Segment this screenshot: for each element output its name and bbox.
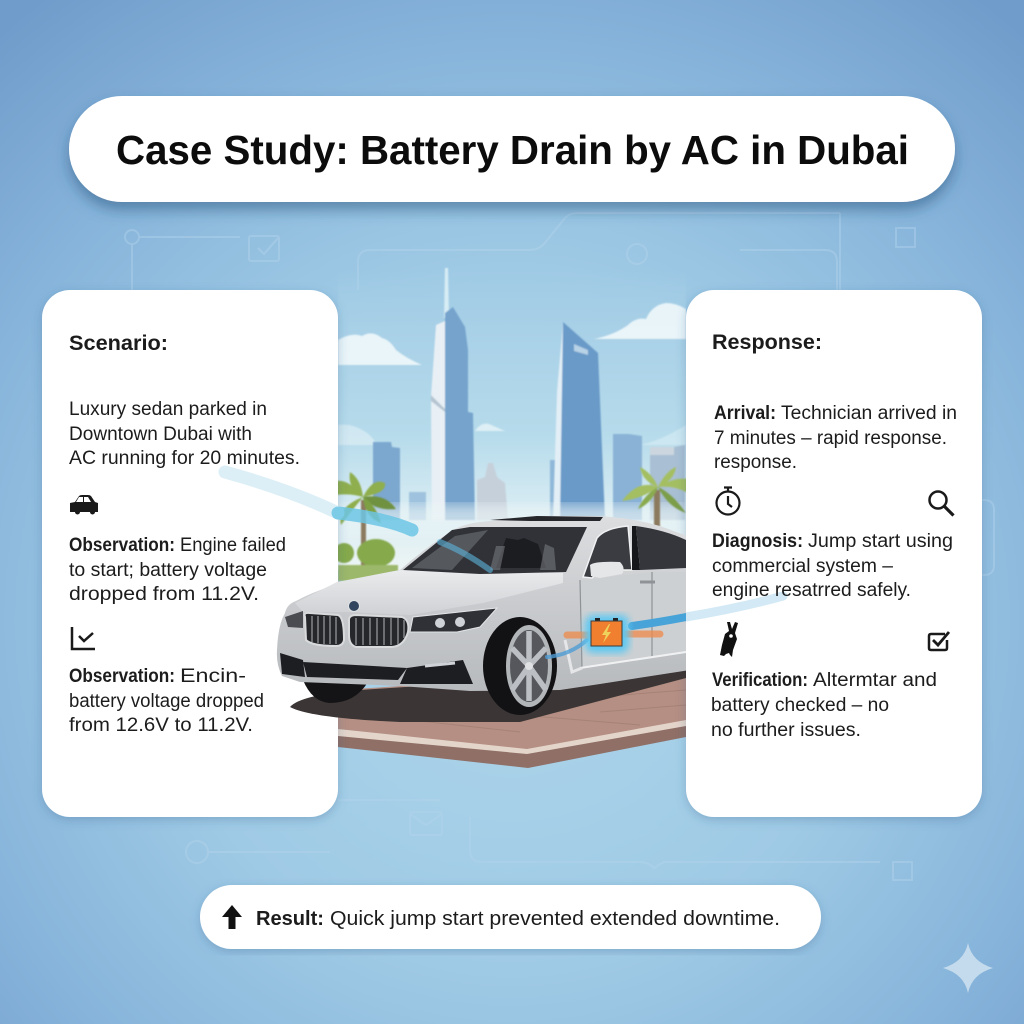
response heading: Response: xyxy=(712,331,822,354)
scenario heading: Scenario: xyxy=(69,332,168,355)
diagnosis text: engine resatrred safely. xyxy=(712,580,911,601)
result callout xyxy=(200,885,821,949)
side windows xyxy=(583,526,632,578)
lower intakes xyxy=(280,653,305,677)
title: Case Study: Battery Drain by AC in Dubai xyxy=(116,127,909,173)
verification text: no further issues. xyxy=(711,720,861,741)
diagnosis text: Diagnosis: xyxy=(712,531,803,552)
observation one xyxy=(69,535,286,605)
air flow stream right xyxy=(686,596,783,617)
observation two: battery voltage dropped xyxy=(69,691,264,712)
observation two: from 12.6V to 11.2V. xyxy=(69,715,253,736)
icon: up arrow xyxy=(222,905,242,929)
observation two xyxy=(69,666,264,736)
car xyxy=(277,516,690,722)
verification text xyxy=(711,670,937,741)
observation one: dropped from 11.2V. xyxy=(69,584,259,605)
arrival text: response. xyxy=(714,452,797,473)
tower: Burj xyxy=(431,268,475,520)
observation one: to start; battery voltage xyxy=(69,560,267,581)
arrival text: 7 minutes – rapid response. xyxy=(714,428,947,449)
title xyxy=(69,96,955,202)
horizon glow xyxy=(346,502,686,526)
diagnosis text xyxy=(712,531,953,601)
grille xyxy=(305,613,408,647)
clouds xyxy=(338,303,686,445)
result callout: Result: xyxy=(256,908,324,930)
observation two: Encin- xyxy=(180,666,246,687)
icon: search xyxy=(930,492,954,516)
car shadow xyxy=(290,668,686,722)
illustration: Dubai skyline xyxy=(334,268,688,768)
pavement xyxy=(338,668,686,768)
icon: sparkle xyxy=(943,943,993,993)
observation one: Observation: xyxy=(69,535,175,556)
front wheel xyxy=(483,617,557,715)
hood xyxy=(295,570,563,615)
verification text: battery checked – no xyxy=(711,695,889,716)
scenario text: Luxury sedan parked in xyxy=(69,399,267,420)
scenario text xyxy=(69,399,300,469)
headlights xyxy=(410,608,497,632)
door panel xyxy=(582,620,686,666)
arrival text: Technician arrived in xyxy=(781,403,957,424)
result callout: Quick jump start prevented extended downtime. xyxy=(330,908,780,930)
circuit line pattern xyxy=(125,213,994,880)
observation two: Observation: xyxy=(69,666,175,687)
scenario text: AC running for 20 minutes. xyxy=(69,448,300,469)
air flow stream left xyxy=(225,472,412,530)
arrival text: Arrival: xyxy=(714,403,776,424)
tower: sail xyxy=(553,322,605,520)
palm right xyxy=(622,467,688,530)
icon: car xyxy=(70,495,98,514)
panel: scenario xyxy=(42,290,338,817)
icon: checkbox xyxy=(929,632,949,650)
palm left xyxy=(334,472,398,581)
car body xyxy=(277,516,690,691)
verification text: Verification: xyxy=(712,670,808,691)
verification text: Altermtar and xyxy=(813,670,937,691)
scenario text: Downtown Dubai with xyxy=(69,424,252,445)
sunroof strip xyxy=(490,516,603,521)
battery glow xyxy=(585,615,629,653)
far buildings xyxy=(373,434,685,520)
icon: timer xyxy=(716,488,740,514)
windshield xyxy=(403,527,587,574)
far front tyre xyxy=(304,682,366,703)
panel: response xyxy=(686,290,982,817)
diagnosis text: commercial system – xyxy=(712,556,893,577)
icon: jumper clamp xyxy=(720,622,738,657)
energy wires xyxy=(440,542,686,657)
badge xyxy=(348,600,360,612)
fender crease xyxy=(565,640,582,672)
icon: battery xyxy=(591,618,622,646)
mirror xyxy=(590,562,624,578)
observation one: Engine failed xyxy=(180,535,286,556)
diagnosis text: Jump start using xyxy=(808,531,953,552)
arrival text xyxy=(714,403,957,473)
icon: chart xyxy=(72,627,95,649)
door lines xyxy=(580,572,652,668)
sky xyxy=(338,328,686,570)
